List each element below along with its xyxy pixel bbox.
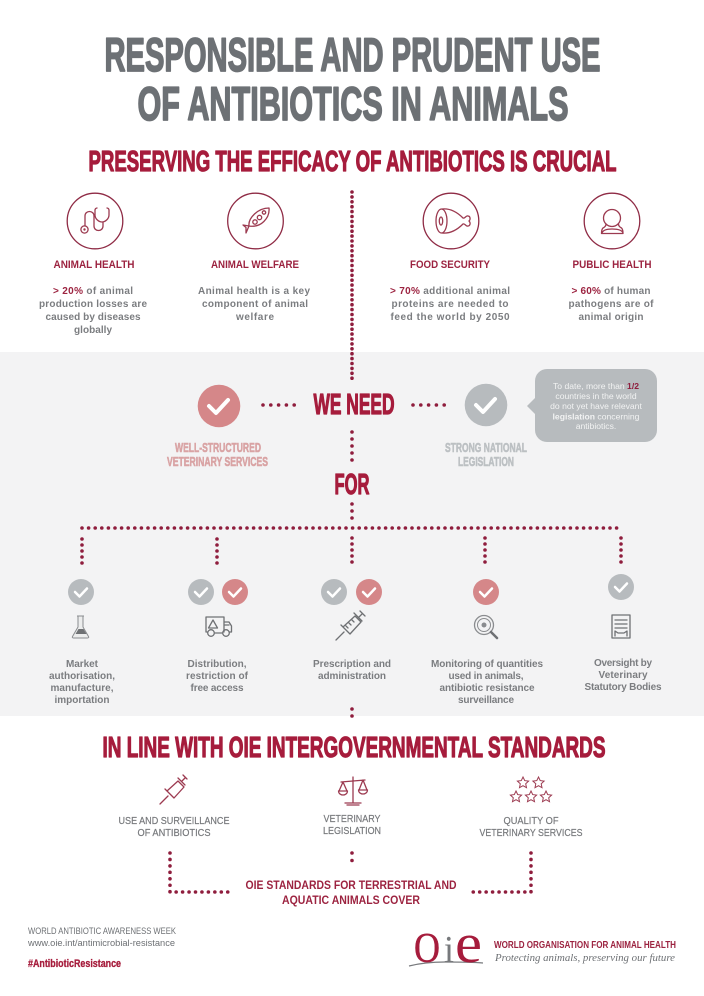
- text block: animal origin: [578, 312, 644, 323]
- text block: Monitoring of quantities: [431, 659, 543, 670]
- dotted tree: [82, 504, 622, 564]
- standards caption: AQUATIC ANIMALS COVER: [282, 893, 420, 907]
- text block: [390, 286, 510, 323]
- logo: OIE: e: [455, 913, 482, 975]
- dotted connector right: [413, 403, 445, 407]
- footer text: #AntibioticResistance: [28, 958, 121, 970]
- dotted connector left: [263, 403, 295, 407]
- text block: free access: [190, 683, 244, 694]
- icon: grey check: [321, 579, 347, 605]
- text block: [568, 286, 654, 323]
- heading: ANIMAL HEALTH: [54, 259, 135, 271]
- organisation name: [494, 939, 676, 964]
- text block: > 70% additional animal: [390, 286, 510, 297]
- footer text: WORLD ANTIBIOTIC AWARENESS WEEK: [28, 926, 176, 936]
- label: national legislation: STRONG NATIONAL: [445, 440, 527, 455]
- callout: legislation: do not yet have relevant: [550, 401, 642, 411]
- callout: legislation: antibiotics.: [576, 421, 616, 431]
- text block: [431, 659, 543, 706]
- footer text: [27, 926, 176, 970]
- we need heading: WE NEED: [314, 389, 394, 421]
- text block: caused by diseases: [46, 312, 141, 323]
- text block: manufacture,: [50, 683, 114, 694]
- text block: > 20% of animal: [53, 286, 133, 297]
- text block: QUALITY OF: [504, 815, 558, 827]
- callout: legislation: countries in the world: [555, 391, 637, 401]
- text block: Market: [66, 659, 99, 670]
- text block: surveillance: [458, 695, 514, 706]
- panel: use and surveillance: [118, 775, 230, 839]
- text block: Veterinary: [598, 670, 648, 681]
- icon: syringe: [336, 611, 365, 640]
- dotted connector to for: [350, 432, 354, 461]
- label: national legislation: [445, 440, 527, 469]
- icon: red check: [473, 579, 499, 605]
- text block: [198, 286, 310, 323]
- panel: veterinary legislation: [323, 777, 381, 837]
- text block: welfare: [235, 312, 274, 323]
- icon: person: [584, 193, 640, 249]
- text block: Oversight by: [594, 658, 652, 669]
- icon: flask: [72, 616, 89, 638]
- text block: proteins are needed to: [392, 299, 508, 310]
- icon: red check: [222, 579, 248, 605]
- text block: [480, 815, 582, 839]
- panel: animal health: [39, 193, 147, 336]
- panel: oversight: [584, 574, 662, 693]
- icon: truck: [206, 617, 232, 636]
- icon: grey check: [608, 574, 634, 600]
- panel: monitoring: [431, 579, 543, 706]
- icon: stars: [510, 777, 552, 802]
- text block: globally: [74, 325, 112, 336]
- callout: legislation: To date, more than 1/2: [553, 381, 639, 391]
- text block: pathogens are of: [568, 299, 654, 310]
- for heading: FOR: [334, 469, 370, 501]
- panel: prescription: [313, 579, 391, 682]
- text block: [323, 813, 381, 837]
- panel: market authorisation: [49, 579, 115, 706]
- text block: [186, 659, 249, 694]
- icon: red check: [198, 385, 240, 427]
- icon: red syringe: [160, 775, 187, 804]
- icon: grey check: [68, 579, 94, 605]
- text block: restriction of: [186, 671, 249, 682]
- logo: OIE: O: [414, 926, 440, 972]
- icon: magnifier: [474, 616, 497, 638]
- heading: FOOD SECURITY: [410, 259, 491, 271]
- standards caption: [246, 878, 457, 907]
- panel: public health: [568, 193, 654, 323]
- logo: OIE: i: [444, 929, 454, 971]
- text block: Animal health is a key: [198, 286, 310, 297]
- icon: document: [612, 615, 630, 638]
- text block: VETERINARY SERVICES: [480, 827, 582, 839]
- text block: [49, 659, 115, 706]
- text block: Prescription and: [313, 659, 391, 670]
- label: national legislation: LEGISLATION: [458, 454, 514, 469]
- callout: legislation: legislation concerning: [553, 412, 640, 422]
- text block: [39, 286, 147, 336]
- panel: animal welfare: [198, 193, 310, 323]
- text block: Statutory Bodies: [584, 682, 662, 693]
- text block: [118, 815, 230, 839]
- text block: importation: [54, 695, 110, 706]
- icon: grey check: [465, 384, 507, 426]
- icon: scales: [338, 777, 368, 805]
- text block: > 60% of human: [572, 286, 650, 297]
- text block: [584, 658, 662, 693]
- text block: used in animals,: [448, 671, 524, 682]
- dotted connector to standards: [350, 709, 354, 723]
- text block: Distribution,: [188, 659, 247, 670]
- text block: [313, 659, 391, 682]
- text block: feed the world by 2050: [390, 312, 510, 323]
- label: veterinary services: WELL-STRUCTURED: [175, 440, 261, 455]
- callout: legislation: [527, 369, 657, 442]
- text block: OF ANTIBIOTICS: [138, 827, 210, 839]
- title: [104, 28, 600, 130]
- text block: production losses are: [39, 299, 147, 310]
- panel: food security: [390, 193, 510, 323]
- heading: ANIMAL WELFARE: [211, 259, 299, 271]
- icon: red check: [356, 579, 382, 605]
- organisation name: Protecting animals, preserving our future: [494, 952, 675, 964]
- text block: administration: [318, 671, 386, 682]
- central dotted line top: [350, 192, 354, 382]
- panel: quality of services: [480, 777, 582, 839]
- heading: PUBLIC HEALTH: [572, 259, 652, 271]
- label: veterinary services: [167, 440, 268, 469]
- standards caption: OIE STANDARDS FOR TERRESTRIAL AND: [246, 878, 457, 892]
- label: veterinary services: VETERINARY SERVICES: [167, 454, 268, 469]
- text block: LEGISLATION: [323, 825, 381, 837]
- icon: ham: [423, 193, 479, 249]
- icon: stethoscope: [67, 193, 123, 249]
- icon: grey check: [188, 579, 214, 605]
- text block: component of animal: [202, 299, 308, 310]
- text block: USE AND SURVEILLANCE: [118, 815, 230, 827]
- panel: distribution: [186, 579, 249, 694]
- icon: fish: [228, 193, 283, 249]
- text block: VETERINARY: [324, 813, 380, 825]
- logo: OIE: [409, 913, 483, 975]
- text block: authorisation,: [49, 671, 115, 682]
- footer text: www.oie.int/antimicrobial-resistance: [27, 938, 175, 948]
- text block: antibiotic resistance: [440, 683, 535, 694]
- dotted brackets: [170, 853, 531, 892]
